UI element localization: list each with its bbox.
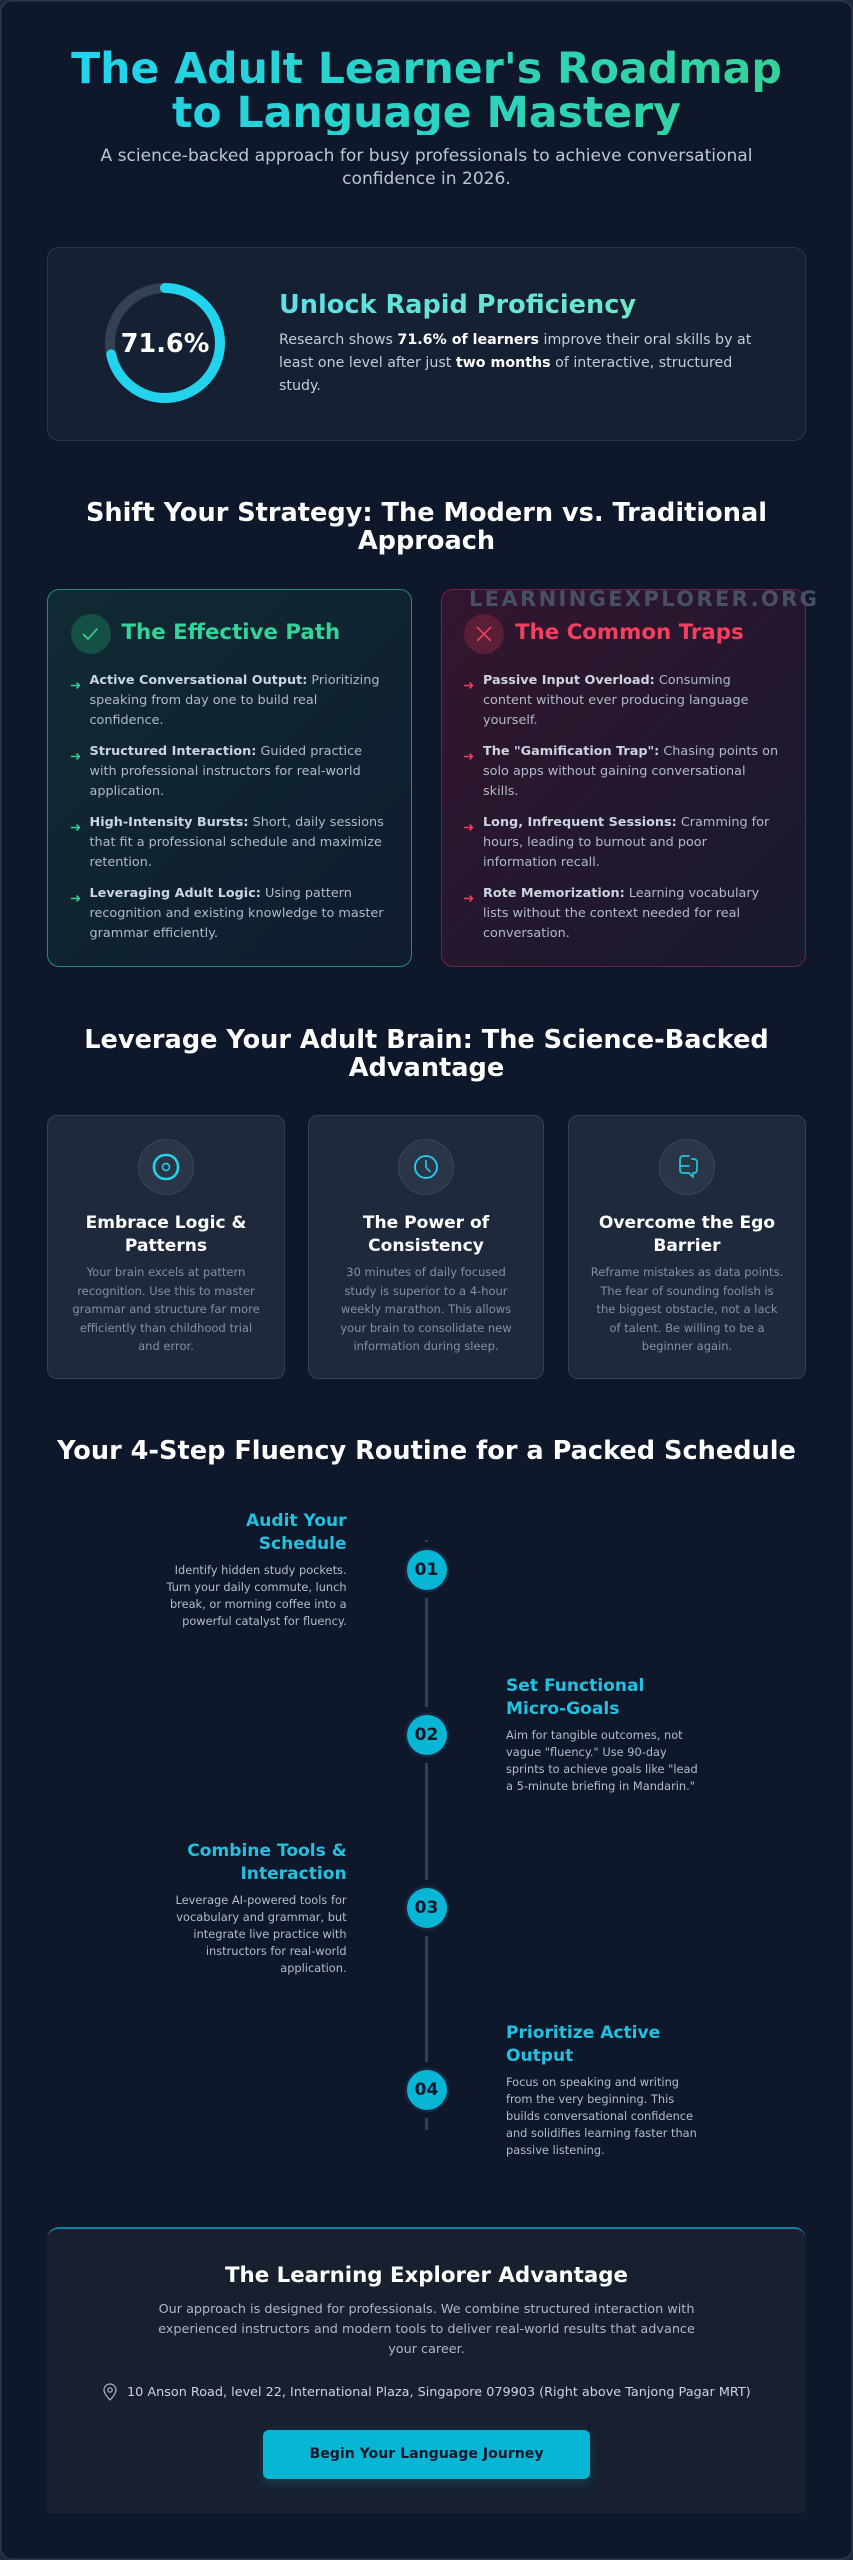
- list item: recognition and existing knowledge to master: [90, 906, 384, 921]
- step 2 title: [506, 1676, 644, 1719]
- timeline spine: [425, 1540, 428, 2130]
- step 3 text: [176, 1841, 347, 1974]
- step 3 description: integrate live practice with: [193, 1926, 347, 1940]
- card description: 30 minutes of daily focused: [346, 1265, 506, 1279]
- step 2 title: Set Functional: [506, 1676, 644, 1696]
- card description: study is superior to a 4-hour: [344, 1284, 508, 1298]
- step node 03: [406, 1888, 446, 1928]
- icon: cross: [464, 614, 504, 654]
- card title: Barrier: [653, 1236, 721, 1256]
- list item: yourself.: [483, 712, 538, 728]
- step 4 description: builds conversational confidence: [506, 2108, 693, 2122]
- step 4 description: Focus on speaking and writing: [506, 2074, 679, 2088]
- card title: [599, 1212, 775, 1256]
- cta description: experienced instructors and modern tools to deliver real-world results that advance: [158, 2322, 695, 2337]
- stat description: study.: [279, 378, 321, 394]
- card description: [591, 1265, 783, 1353]
- card description: [72, 1265, 260, 1353]
- step node 02: 02: [415, 1725, 438, 1745]
- step 1 description: powerful catalyst for fluency.: [182, 1614, 347, 1628]
- list item: [71, 672, 379, 728]
- list item: Rote Memorization: Learning vocabulary: [483, 886, 759, 901]
- step 1 text: [166, 1511, 347, 1628]
- step 1 title: Schedule: [259, 1534, 347, 1554]
- step 4 description: and solidifies learning faster than: [506, 2126, 697, 2140]
- card description: of talent. Be willing to be a: [609, 1320, 764, 1334]
- step node 01: [406, 1550, 446, 1590]
- step 4 title: Output: [506, 2046, 573, 2066]
- heading: strategy: Approach: [358, 526, 495, 556]
- card description: beginner again.: [642, 1339, 732, 1353]
- heading: adult brain: Advantage: [349, 1053, 504, 1083]
- list item: [464, 672, 749, 728]
- card description: the biggest obstacle, not a lack: [596, 1302, 778, 1316]
- list item: grammar efficiently.: [90, 926, 218, 941]
- panel: the effective path: [47, 589, 412, 967]
- card description: The fear of sounding foolish is: [600, 1284, 774, 1298]
- card title: Consistency: [368, 1236, 484, 1256]
- heading: strategy: [86, 498, 767, 556]
- list item: Structured Interaction: Guided practice: [90, 744, 362, 759]
- watermark: LEARNINGEXPLORER.ORG: [469, 586, 819, 610]
- list item: application.: [90, 784, 164, 799]
- subtitle: [100, 146, 752, 188]
- step 2 description: a 5-minute briefing in Mandarin.": [506, 1778, 695, 1792]
- stat description: [279, 332, 751, 394]
- card title: The Power of: [363, 1212, 489, 1232]
- cta description: your career.: [388, 2342, 465, 2357]
- list item: information recall.: [483, 855, 600, 870]
- step 4 text: [506, 2023, 697, 2156]
- cta description: Our approach is designed for professionals. We combine structured interaction with: [159, 2302, 694, 2317]
- list item: lists without the context needed for real: [483, 906, 740, 921]
- card description: Your brain excels at pattern: [87, 1265, 245, 1279]
- stat heading: Unlock Rapid Proficiency: [279, 290, 636, 320]
- list item: retention.: [90, 855, 152, 870]
- panel: call to action: [47, 2227, 806, 2513]
- icon: location pin: [103, 2383, 117, 2401]
- step node 03: 03: [415, 1898, 438, 1918]
- list item: with professional instructors for real-world: [90, 764, 361, 779]
- panel: stat card: [47, 247, 806, 441]
- list item: Long, Infrequent Sessions: Cramming for: [483, 815, 769, 830]
- list item: speaking from day one to build real: [90, 692, 317, 708]
- card title: Overcome the Ego: [599, 1212, 775, 1232]
- timeline: [166, 1511, 698, 2156]
- stat description: least one level after just two months of interactive, structured: [279, 355, 732, 371]
- step 4 title: [506, 2023, 660, 2066]
- list item: [71, 744, 362, 799]
- list item: Active Conversational Output: Prioritizing: [90, 672, 379, 688]
- title: The Adult Learner's Roadmap: [71, 44, 782, 94]
- card description: [340, 1265, 512, 1353]
- cta button: [263, 2430, 590, 2479]
- card description: your brain to consolidate new: [340, 1320, 512, 1334]
- icon: brain: [138, 1139, 194, 1195]
- step 2 description: vague "fluency." Use 90-day: [506, 1744, 667, 1758]
- cta description: [158, 2302, 695, 2357]
- icon: speech bubble: [659, 1139, 715, 1195]
- list item: [464, 744, 778, 799]
- list item: hours, leading to burnout and poor: [483, 835, 707, 850]
- heading: adult brain: [84, 1025, 769, 1083]
- stat description: Research shows 71.6% of learners improve their oral skills by at: [279, 332, 751, 348]
- card description: recognition. Use this to master: [77, 1284, 255, 1298]
- step 2 description: sprints to achieve goals like "lead: [506, 1762, 698, 1776]
- heading: adult brain: Leverage Your Adult Brain: The Science-Backed: [84, 1025, 769, 1055]
- title: [0, 47, 853, 135]
- donut chart: 71.6%: [105, 283, 225, 403]
- list item: [464, 815, 770, 870]
- step 1 title: Audit Your: [246, 1511, 347, 1531]
- subtitle: A science-backed approach for busy professionals to achieve conversational: [100, 146, 752, 166]
- list item: Leveraging Adult Logic: Using pattern: [90, 886, 352, 901]
- step 2 description: [506, 1728, 698, 1792]
- step 4 description: passive listening.: [506, 2142, 605, 2156]
- step node 02: [406, 1715, 446, 1755]
- list item: High-Intensity Bursts: Short, daily sessions: [90, 815, 384, 830]
- list item: confidence.: [90, 712, 164, 728]
- heading: routine: Your 4-Step Fluency Routine for a Packed Schedule: [57, 1436, 796, 1466]
- card description: efficiently than childhood trial: [80, 1320, 252, 1334]
- list item: [71, 815, 384, 870]
- step 4 description: [506, 2074, 697, 2156]
- card description: information during sleep.: [353, 1339, 499, 1353]
- step 2 text: [506, 1676, 698, 1792]
- list item: Passive Input Overload: Consuming: [483, 672, 731, 688]
- step 1 title: [246, 1511, 347, 1554]
- step 3 title: Combine Tools &: [187, 1841, 347, 1861]
- icon: check: [70, 614, 110, 654]
- list item: conversation.: [483, 926, 570, 941]
- list item: solo apps without gaining conversational: [483, 764, 746, 779]
- step 4 title: Prioritize Active: [506, 2023, 660, 2043]
- card title: Patterns: [125, 1236, 207, 1256]
- list item: content without ever producing language: [483, 692, 749, 708]
- step 1 description: Turn your daily commute, lunch: [166, 1580, 347, 1594]
- step 3 title: Interaction: [240, 1864, 347, 1884]
- donut chart: 71.6%: 71.6%: [121, 329, 209, 359]
- panel: the common traps: [440, 589, 806, 967]
- panel: logic and patterns: [47, 1115, 285, 1379]
- step 3 description: [176, 1892, 347, 1974]
- panel heading: The Effective Path: [122, 620, 340, 645]
- card title: [86, 1212, 246, 1256]
- list item: The "Gamification Trap": Chasing points on: [483, 744, 778, 759]
- list item: [71, 886, 384, 941]
- step 1 description: [166, 1562, 347, 1628]
- step 2 title: Micro-Goals: [506, 1699, 619, 1719]
- step 3 title: [187, 1841, 347, 1884]
- card description: grammar and structure far more: [72, 1302, 260, 1316]
- step node 04: 04: [415, 2080, 438, 2100]
- step 3 description: application.: [280, 1960, 347, 1974]
- card description: Reframe mistakes as data points.: [591, 1265, 783, 1279]
- step 3 description: Leverage AI-powered tools for: [176, 1892, 347, 1906]
- heading: strategy: Shift Your Strategy: The Modern vs. Traditional: [86, 498, 767, 528]
- card description: and error.: [138, 1339, 194, 1353]
- step 1 description: Identify hidden study pockets.: [175, 1562, 347, 1576]
- step 3 description: instructors for real-world: [206, 1944, 347, 1958]
- subtitle: confidence in 2026.: [342, 168, 511, 188]
- list item: that fit a professional schedule and maximize: [90, 835, 382, 850]
- icon: clock: [398, 1139, 454, 1195]
- cta button: Begin Your Language Journey: [309, 2446, 544, 2462]
- panel heading: The Common Traps: [515, 620, 744, 645]
- panel: ego barrier: [568, 1115, 806, 1379]
- step node 04: [406, 2070, 446, 2110]
- list item: [464, 886, 759, 941]
- cta heading: The Learning Explorer Advantage: [225, 2262, 628, 2288]
- step 4 description: from the very beginning. This: [506, 2092, 674, 2106]
- address: 10 Anson Road, level 22, International Plaza, Singapore 079903 (Right above Tanjong Pagar MRT): [127, 2384, 751, 2400]
- step 2 description: Aim for tangible outcomes, not: [506, 1728, 683, 1742]
- step 3 description: vocabulary and grammar, but: [176, 1910, 347, 1924]
- card description: weekly marathon. This allows: [341, 1302, 511, 1316]
- card title: Embrace Logic &: [86, 1212, 246, 1232]
- card title: [362, 1212, 490, 1256]
- list item: skills.: [483, 784, 518, 799]
- panel: consistency: [308, 1115, 544, 1379]
- title: to Language Mastery: [172, 88, 681, 138]
- step node 01: 01: [415, 1560, 438, 1580]
- step 1 description: break, or morning coffee into a: [170, 1596, 347, 1610]
